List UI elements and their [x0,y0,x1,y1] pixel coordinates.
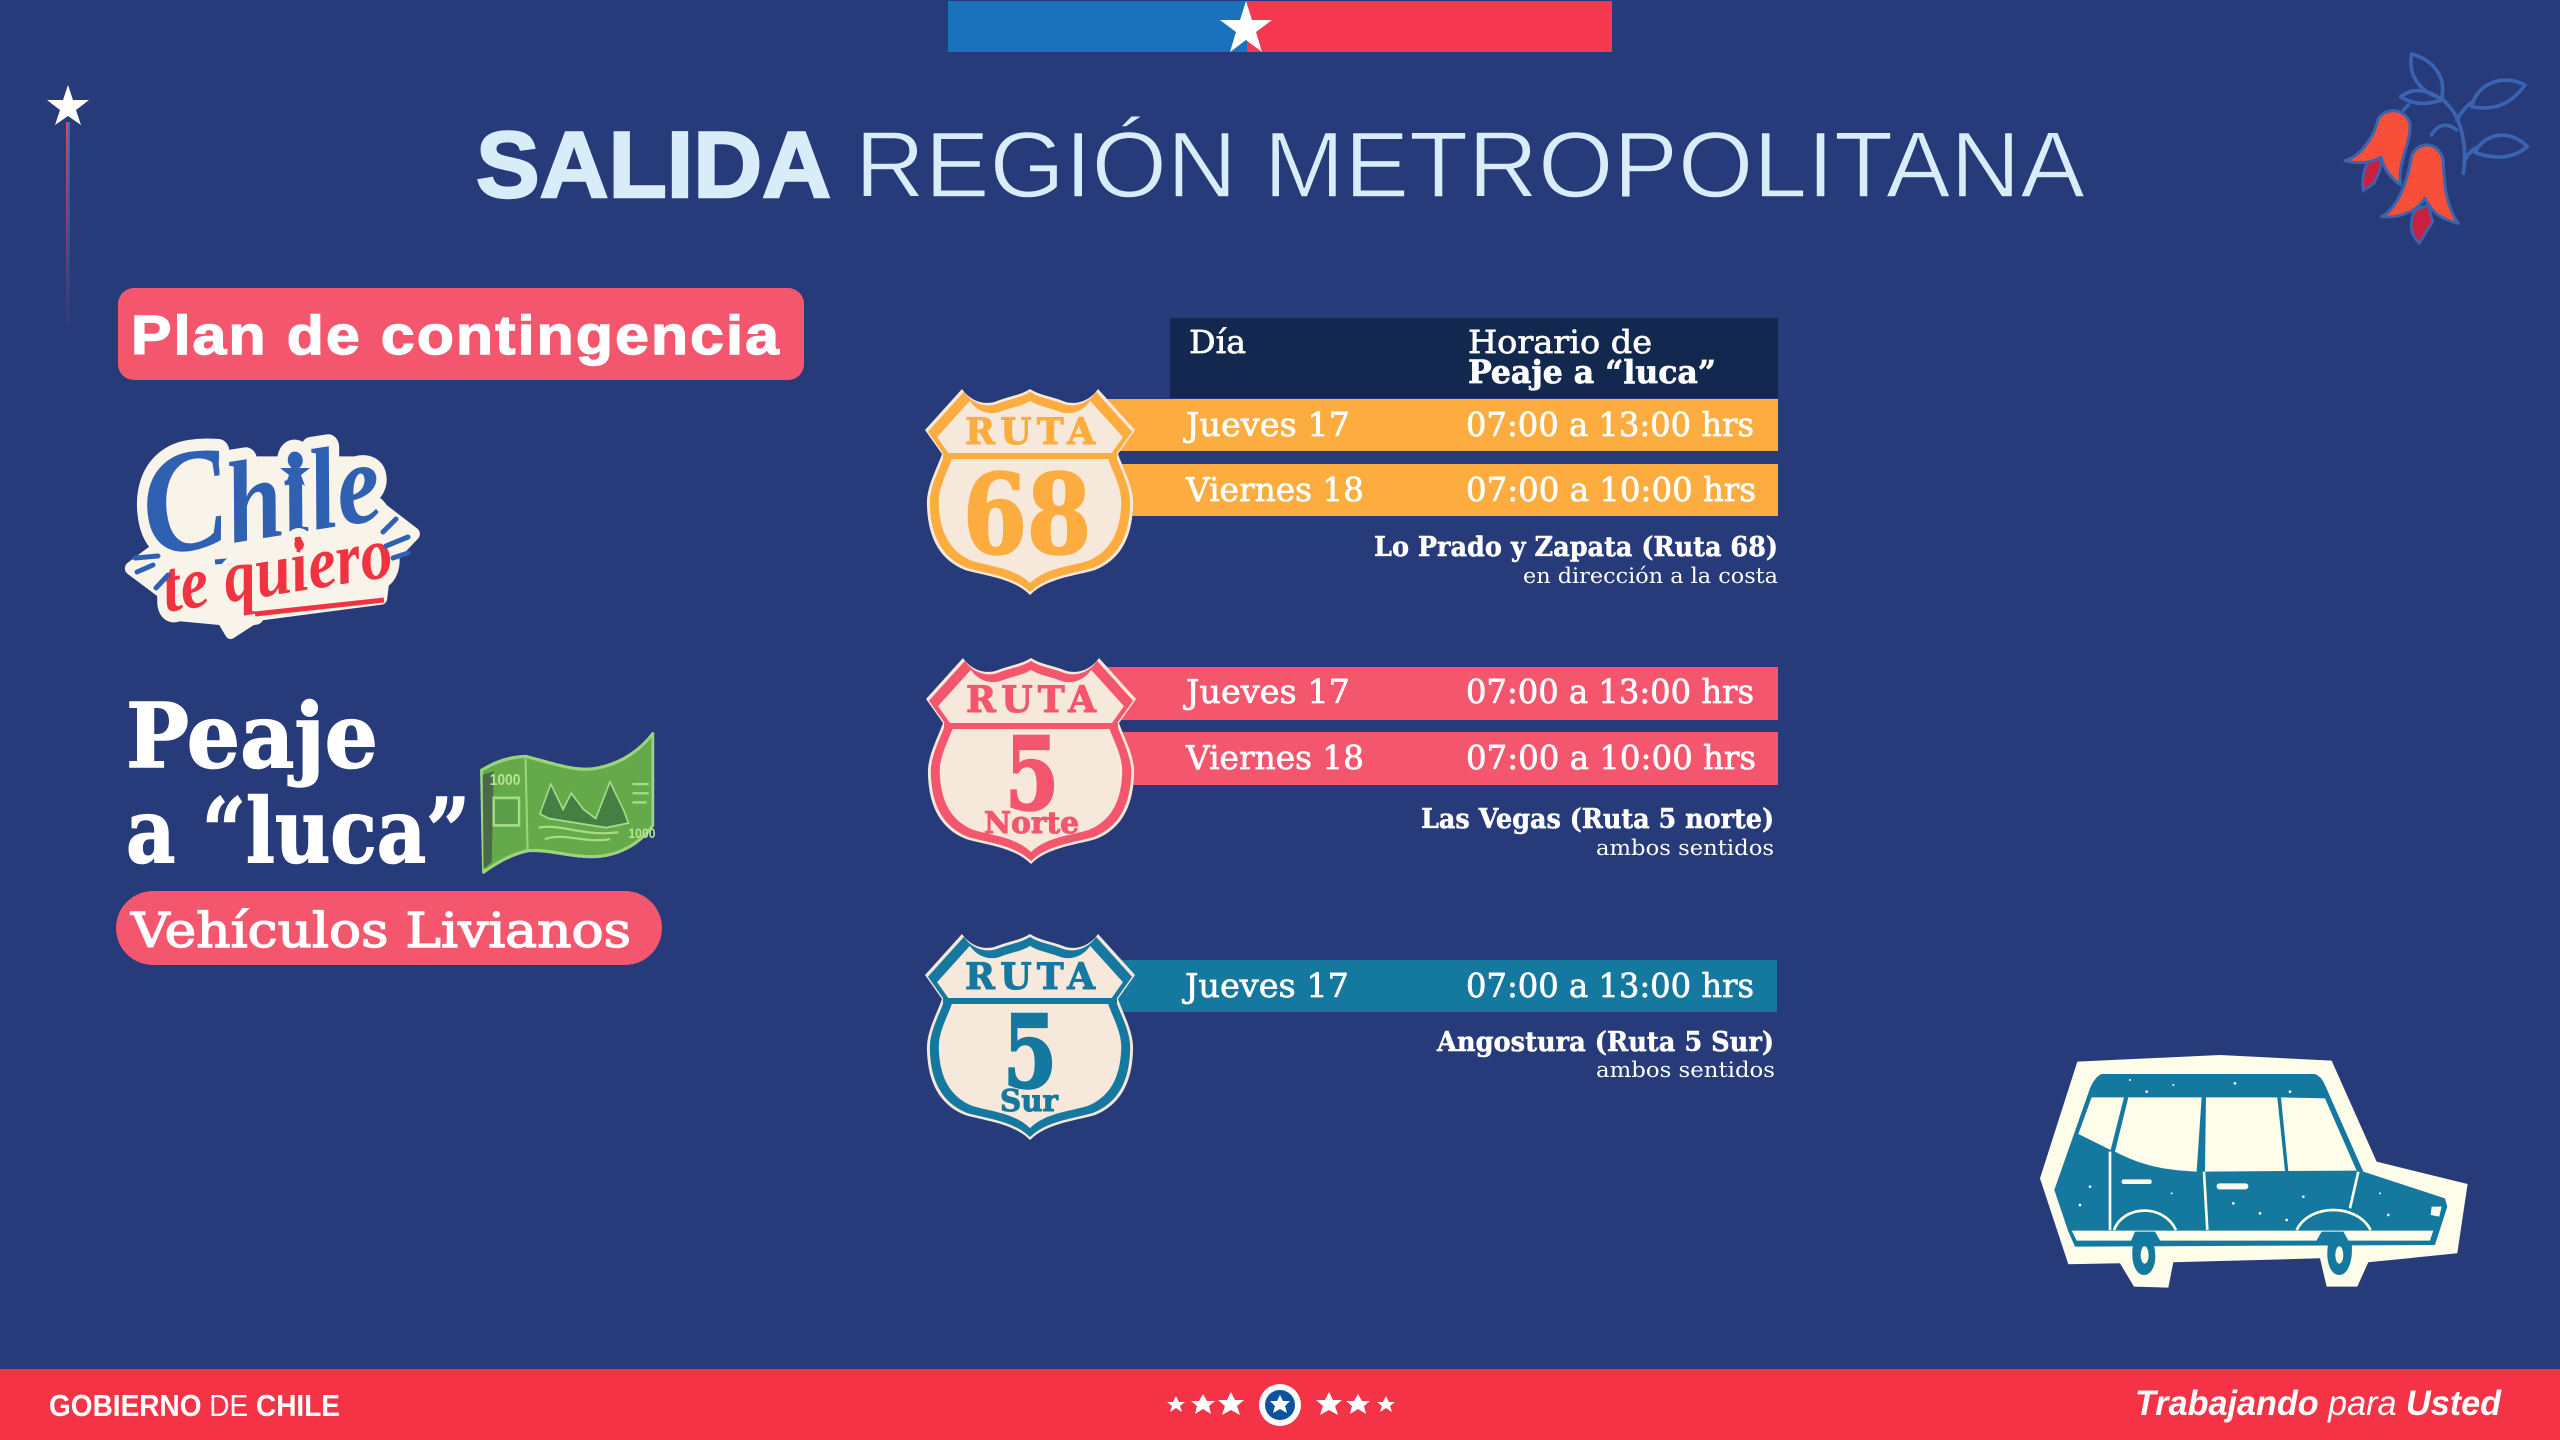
heading: Peaje a "luca": a “luca” [126,778,470,883]
logo: Chile te quiero: te quiero [156,512,398,629]
panel: ruta 68 rows: 07:00 a 10:00 hrs [1466,470,1756,509]
icon: green banknote: 1000 [490,772,520,789]
panel: ruta 5 norte rows: 07:00 a 13:00 hrs [1466,672,1754,711]
text: Las Vegas [1421,804,1774,860]
shield: ruta 5 norte: 5 [1005,715,1059,833]
footer bar [0,1369,2560,1440]
table header: Horario de [1468,323,1652,361]
panel: ruta 68 rows [1100,399,1778,516]
icon: car [2040,1055,2468,1288]
panel: ruta 68 rows: 07:00 a 13:00 hrs [1466,405,1754,444]
shield: ruta 5 sur [925,934,1135,1140]
text: Las Vegas: ambos sentidos [1596,836,1774,860]
icon: copihue flower [2345,54,2527,243]
panel: ruta 5 sur row [1100,960,1777,1012]
label: Plan de contingencia [118,288,804,380]
shield: ruta 5 norte: RUTA [966,679,1097,721]
shield: ruta 68: 68 [963,450,1091,579]
shield: ruta 5 sur: 5 [1003,993,1057,1111]
text: Lo Prado y Zapata: Lo Prado y Zapata (Ruta 68) [1374,532,1778,563]
footer text: Gobierno de Chile: GOBIERNO DE CHILE [49,1388,340,1423]
text: Angostura [1436,1027,1775,1082]
icon: green banknote: 1000 [628,826,656,841]
footer text: Trabajando para Usted: Trabajando para Usted [2135,1384,2502,1423]
shield: ruta 68 [925,389,1135,595]
shield: ruta 68: RUTA [965,411,1096,453]
title: REGIÓN METROPOLITANA [855,112,2085,217]
panel: ruta 5 norte rows: 07:00 a 10:00 hrs [1466,738,1756,777]
panel: ruta 5 sur row: 07:00 a 13:00 hrs [1466,966,1754,1005]
left star with fading line [47,85,89,334]
text: Las Vegas: Las Vegas (Ruta 5 norte) [1421,804,1774,835]
label: Vehículos Livianos [116,891,662,965]
text: Lo Prado y Zapata: en dirección a la costa [1523,564,1778,588]
shield: ruta 5 norte: Norte [984,806,1079,841]
heading: Peaje a "luca": Peaje [126,683,378,788]
icon: green banknote [481,734,656,872]
panel: ruta 5 norte rows [1100,667,1778,785]
shield: ruta 5 sur: RUTA [965,956,1096,998]
shield: ruta 5 sur: Sur [1000,1084,1059,1119]
text: Angostura: ambos sentidos [1596,1058,1775,1082]
panel: ruta 5 sur row: Jueves 17 [1182,966,1349,1005]
heading: Peaje a "luca" [126,683,470,883]
text: Lo Prado y Zapata [1374,532,1778,588]
table header [1170,318,1778,398]
logo: Chile te quiero: Chile [130,390,390,588]
label: Vehículos Livianos: Vehículos Livianos [130,903,631,959]
title: SALIDA [476,112,831,217]
label: Plan de contingencia: Plan de contingencia [131,304,781,366]
panel: ruta 68 rows: Jueves 17 [1183,405,1350,444]
table header: Peaje a “luca” [1468,353,1716,391]
panel: ruta 5 norte rows: Jueves 17 [1183,672,1350,711]
shield: ruta 5 norte [926,658,1136,864]
footer emblem [1167,1384,1395,1426]
panel: ruta 5 norte rows: Viernes 18 [1185,738,1364,777]
panel: ruta 68 rows: Viernes 18 [1185,470,1364,509]
table header: Día [1189,323,1246,361]
top flag band [948,1,1612,52]
text: Angostura: Angostura (Ruta 5 Sur) [1436,1027,1774,1058]
